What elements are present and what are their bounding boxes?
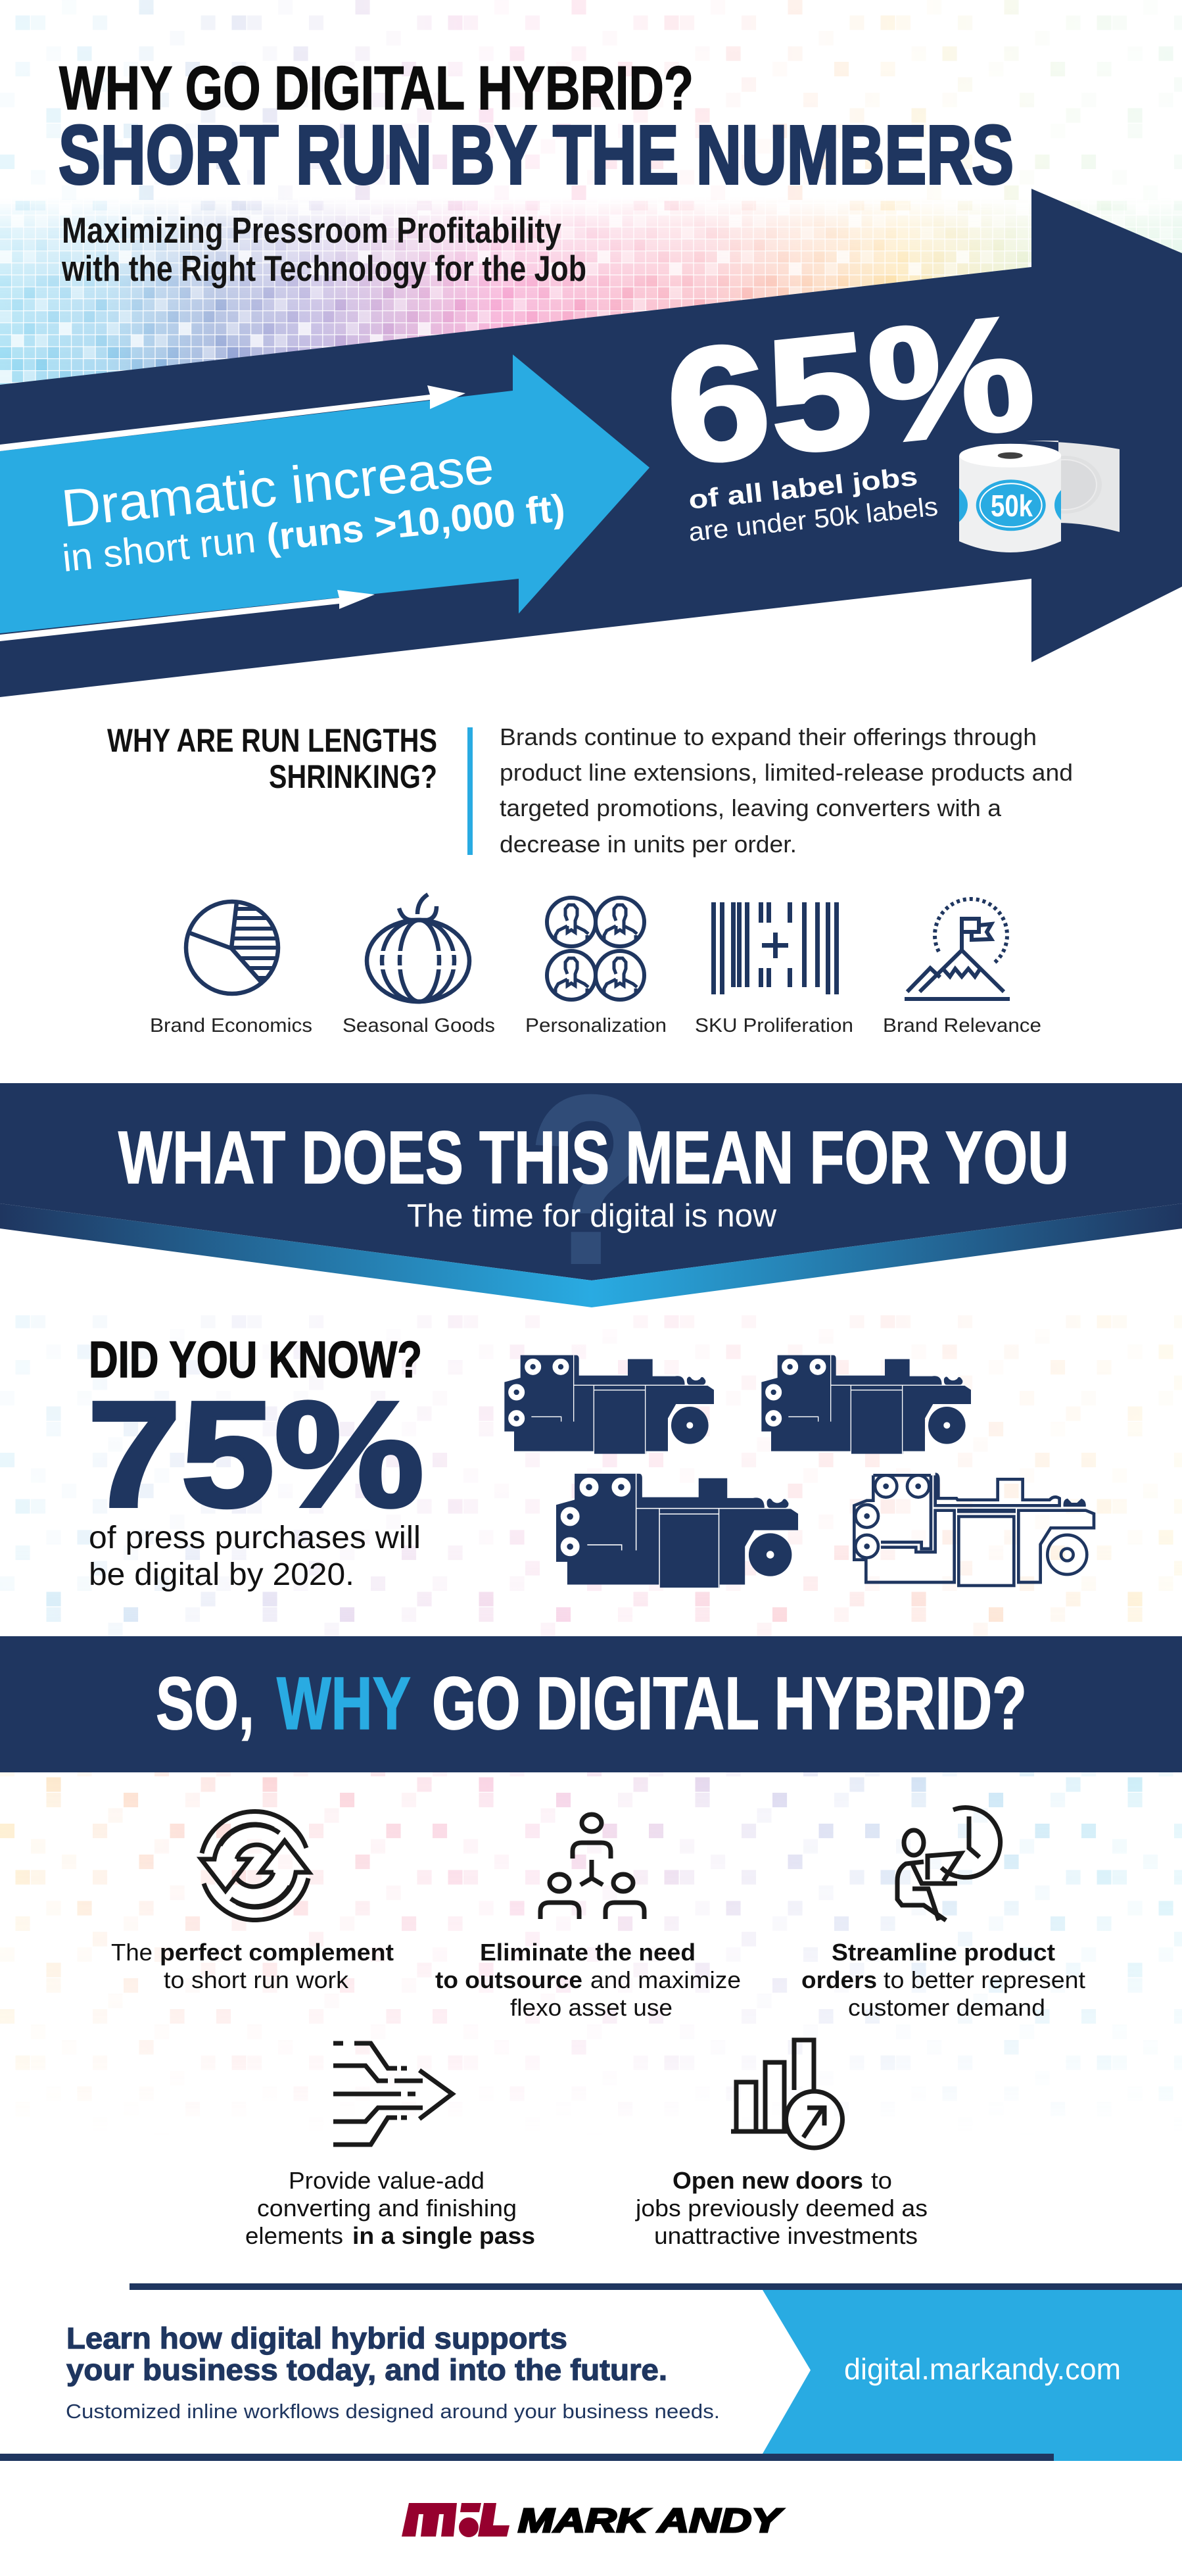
- background: lower pixel mosaic: [0, 1772, 1182, 2093]
- text: streamline product: [801, 1939, 1085, 2021]
- icon: label roll: [959, 441, 1120, 552]
- text: open new doors: [635, 2167, 928, 2249]
- text: press purchases: of press purchases will: [89, 1520, 421, 1555]
- icon: pumpkin: [367, 894, 469, 1002]
- icon: press 3: [556, 1474, 798, 1588]
- banner: so why go digital hybrid: [0, 1636, 1182, 1772]
- text: customized workflows: Customized inline workflows designed around your business needs.: [66, 2400, 720, 2423]
- watermark: question mark: ?: [526, 1044, 655, 1316]
- icon: pie chart: [186, 902, 283, 994]
- text: streamline product: to better represent: [884, 1966, 1085, 1993]
- text block: brands paragraph: targeted promotions, leaving converters with a: [500, 794, 1002, 821]
- heading: why are run lengths shrinking: SHRINKING?: [269, 758, 437, 795]
- text: eliminate the need: [435, 1939, 741, 2021]
- icon: mountain flag: [905, 899, 1010, 1001]
- icon: bar chart with arrow: [731, 2040, 843, 2148]
- subtitle: [61, 210, 586, 289]
- text: perfect complement: to short run work: [164, 1966, 349, 1993]
- text: dramatic increase: Dramatic increase: [59, 436, 496, 538]
- icon: team hierarchy: [540, 1814, 644, 1919]
- icon: barcode: [711, 902, 839, 994]
- subheading: time for digital: The time for digital is now: [407, 1198, 777, 1234]
- text: value-add: elements: [245, 2222, 343, 2249]
- banner: so why go digital hybrid: SO,: [156, 1662, 254, 1745]
- link: website: digital.markandy.com: [844, 2352, 1121, 2386]
- label: brand economics: Brand Economics: [150, 1015, 312, 1036]
- text: perfect complement: The: [111, 1939, 153, 1966]
- heading: learn how: Learn how digital hybrid supports: [66, 2321, 567, 2355]
- icon: person at laptop with clock: [897, 1808, 1001, 1920]
- text: streamline product: orders: [801, 1966, 877, 1993]
- heading: learn how: your business today, and into the future.: [66, 2353, 667, 2387]
- text: press purchases: [89, 1520, 421, 1592]
- heading: learn how: [66, 2321, 667, 2387]
- text: open new doors: jobs previously deemed as: [635, 2195, 928, 2222]
- text: value-add: Provide value-add: [289, 2167, 485, 2194]
- text block: brands paragraph: product line extensions, limited-release products and: [500, 759, 1073, 786]
- logo: mark andy: [402, 2502, 784, 2539]
- banner: so why go digital hybrid: WHY: [277, 1662, 411, 1745]
- label: brand relevance: Brand Relevance: [883, 1015, 1041, 1036]
- text: eliminate the need: and maximize: [590, 1966, 741, 1993]
- text: eliminate the need: to outsource: [435, 1966, 582, 1993]
- background: hero pixel mosaic: [0, 0, 1182, 408]
- text block: brands paragraph: decrease in units per order.: [500, 831, 797, 858]
- background: middle pixel mosaic: [0, 1315, 1182, 1636]
- text: eliminate the need: Eliminate the need: [480, 1939, 696, 1966]
- text: perfect complement: [111, 1939, 394, 1993]
- light blue arrow: [0, 354, 650, 641]
- statistic: 65 percent: are under 50k labels: [687, 492, 939, 547]
- icon: press 4 outline: [854, 1474, 1094, 1586]
- icon: personalization: [547, 898, 644, 1000]
- icon: refresh cycle: [201, 1811, 309, 1920]
- text block: brands paragraph: [500, 723, 1073, 858]
- heading: why are run lengths shrinking: [107, 722, 437, 795]
- text: dramatic increase: in short run: [60, 518, 258, 580]
- banner: what does this mean for you: [0, 1044, 1182, 1316]
- divider bar: [467, 727, 473, 855]
- text: dramatic increase: (runs >10,000 ft): [264, 487, 567, 559]
- icon: press 2: [761, 1355, 971, 1454]
- statistic: 75 percent: 75%: [87, 1371, 424, 1538]
- arrow line: top white: [0, 385, 465, 451]
- statistic: 65 percent: 65%: [658, 281, 1041, 498]
- label: sku proliferation: SKU Proliferation: [695, 1015, 853, 1036]
- text block: brands paragraph: Brands continue to expand their offerings through: [500, 723, 1037, 750]
- statistic: 65 percent: of all label jobs: [687, 462, 919, 515]
- text: dramatic increase: [59, 436, 567, 580]
- label: seasonal goods: Seasonal Goods: [343, 1015, 495, 1036]
- panel: call to action footer: [0, 2283, 1182, 2461]
- text: value-add: [245, 2167, 535, 2249]
- label: personalization: Personalization: [525, 1015, 667, 1036]
- text: open new doors: unattractive investments: [654, 2222, 918, 2249]
- subtitle: Maximizing Pressroom Profitability: [62, 210, 561, 251]
- text: open new doors: Open new doors: [673, 2167, 863, 2194]
- subtitle: with the Right Technology for the Job: [61, 248, 586, 289]
- text: press purchases: be digital by 2020.: [89, 1557, 354, 1592]
- text: open new doors: to: [871, 2167, 892, 2194]
- text: value-add: converting and finishing: [257, 2195, 517, 2222]
- big navy arrow: [0, 189, 1182, 697]
- title: why go digital hybrid: WHY GO DIGITAL HYBRID?: [59, 53, 694, 122]
- arrow line: bottom white: [0, 590, 375, 641]
- heading: did you know: DID YOU KNOW?: [89, 1330, 422, 1388]
- icon: press 1: [504, 1355, 714, 1454]
- text: streamline product: customer demand: [848, 1994, 1045, 2021]
- logo: mark andy: MARK ANDY: [518, 2502, 784, 2539]
- text: perfect complement: perfect complement: [160, 1939, 394, 1966]
- icon: converging lines arrow: [333, 2043, 452, 2145]
- icon: label roll: 50k: [991, 489, 1033, 523]
- heading: why are run lengths shrinking: WHY ARE RUN LENGTHS: [107, 722, 437, 759]
- text: streamline product: Streamline product: [832, 1939, 1055, 1966]
- text: value-add: in a single pass: [352, 2222, 535, 2249]
- text: eliminate the need: flexo asset use: [510, 1994, 673, 2021]
